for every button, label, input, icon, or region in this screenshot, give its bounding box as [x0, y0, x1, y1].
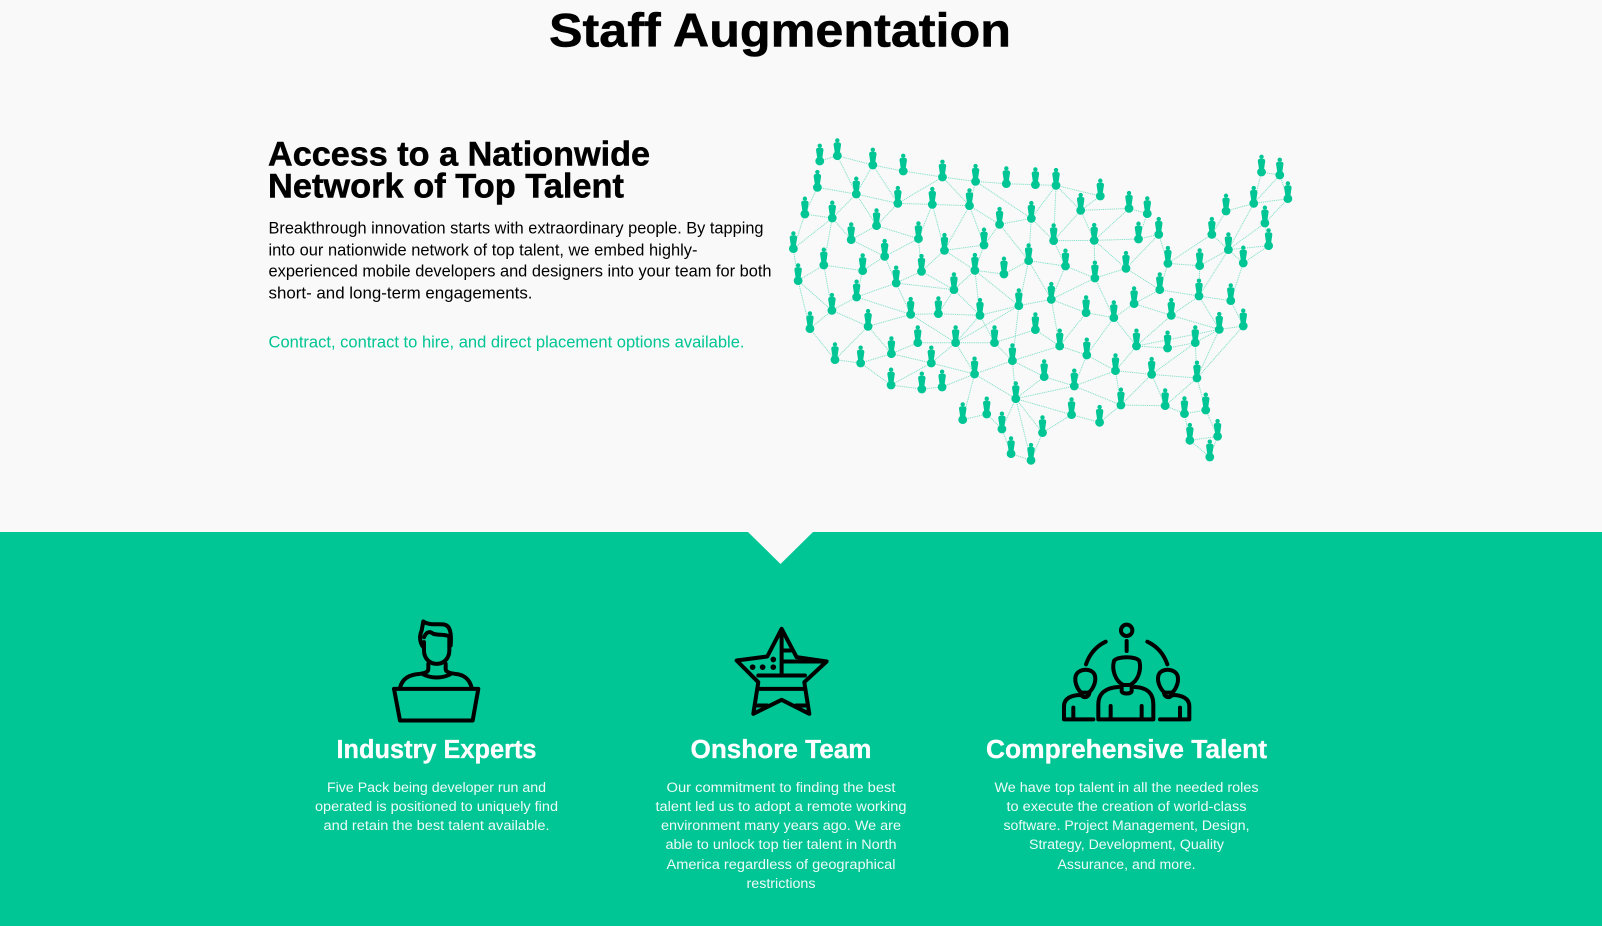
text: industry experts description: Five Pack being developer run and: [327, 780, 546, 796]
options note: Contract, contract to hire, and direct placement options available.: [268, 334, 744, 352]
title: Staff Augmentation: [549, 4, 1011, 56]
panel: green features band: [0, 532, 1602, 926]
text: comprehensive talent description: to execute the creation of world-class: [1006, 799, 1246, 815]
intro text block: short- and long-term engagements.: [268, 284, 532, 302]
intro text block: Breakthrough innovation starts with extraordinary people. By tapping: [268, 220, 764, 238]
panel: onshore team: [656, 736, 906, 892]
text: onshore team description: environment many years ago. We are: [661, 818, 901, 834]
intro text block: into our nationwide network of top talent, we embed highly-: [268, 242, 698, 260]
panel: industry experts: [315, 736, 558, 834]
text: industry experts description: operated is positioned to uniquely find: [315, 799, 558, 815]
text: comprehensive talent description: We have top talent in all the needed roles: [994, 780, 1258, 796]
panel: comprehensive talent: [986, 736, 1268, 873]
heading: access to talent: Access to a Nationwide: [268, 136, 650, 174]
talent nodes: [789, 138, 1292, 465]
arrow: notch pointer: [748, 532, 813, 564]
text: industry experts description: and retain the best talent available.: [324, 818, 550, 834]
text: industry experts description: [315, 780, 558, 834]
network connections: [793, 156, 1288, 460]
heading: onshore team: Onshore Team: [690, 736, 872, 764]
text: onshore team description: restrictions: [746, 876, 816, 892]
text: comprehensive talent description: Assurance, and more.: [1058, 857, 1196, 873]
text: comprehensive talent description: software. Project Management, Design,: [1004, 818, 1250, 834]
heading: access to talent: [268, 136, 650, 206]
text: onshore team description: [656, 780, 906, 892]
icon: developer at laptop: [394, 621, 478, 720]
intro text block: experienced mobile developers and designers into your team for both: [268, 262, 772, 280]
chart: US talent network map: [789, 138, 1292, 465]
icon: team with shared node: [1064, 625, 1189, 719]
heading: comprehensive talent: Comprehensive Talent: [986, 736, 1268, 764]
text: onshore team description: America regardless of geographical: [666, 857, 896, 873]
text: comprehensive talent description: [994, 780, 1258, 873]
heading: industry experts: Industry Experts: [336, 736, 536, 764]
text: onshore team description: able to unlock top tier talent in North: [666, 837, 896, 853]
icon: american flag star: [737, 629, 827, 714]
heading: access to talent: Network of Top Talent: [268, 168, 624, 206]
text: onshore team description: Our commitment to finding the best: [666, 780, 896, 796]
intro text block: [268, 220, 772, 302]
text: onshore team description: talent led us to adopt a remote working: [656, 799, 906, 815]
text: comprehensive talent description: Strategy, Development, Quality: [1029, 837, 1225, 853]
